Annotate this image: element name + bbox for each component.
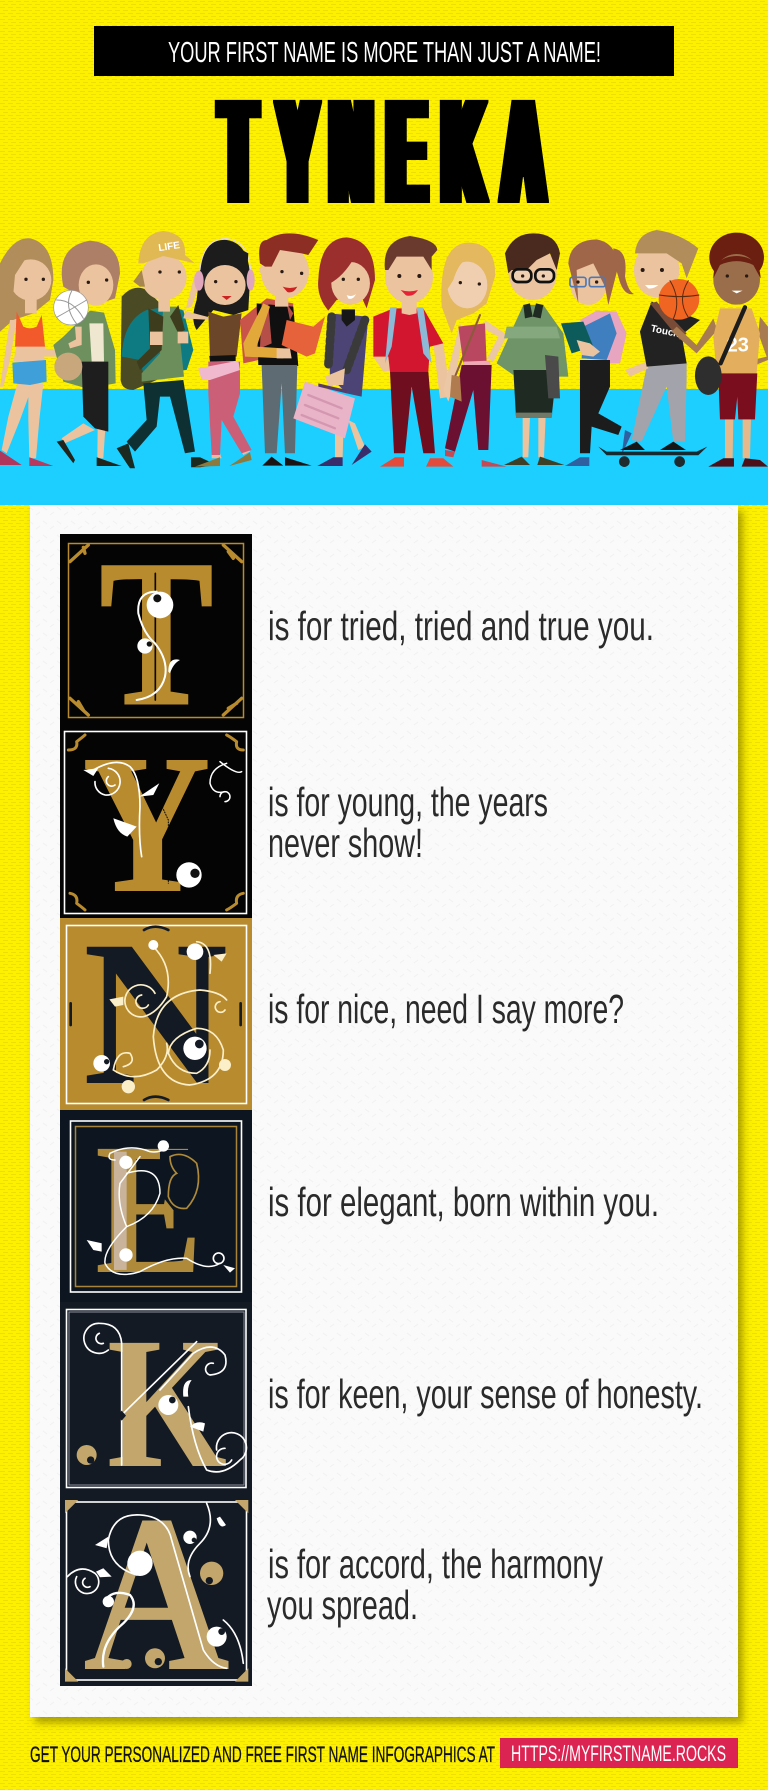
tile A: A [83,1468,230,1718]
tile N: N [83,898,228,1128]
person 3: hiker with backpack and cap [117,231,217,468]
person 3: hiker with backpack and cap: LIFE [158,240,181,254]
illustration: group of twelve young people [0,230,768,468]
header banner [94,26,674,76]
title: name: TYNEKA [221,68,543,234]
person 11: skater with basketball [598,230,707,467]
tile E: E [95,1104,203,1313]
text: A lines: is for accord, the harmony [268,1541,603,1587]
white card panel [30,505,738,1717]
floor band [0,389,768,505]
person 4: girl with headphones [182,239,255,467]
text: Y lines: never show! [268,820,423,866]
text: Y lines [268,779,548,866]
tile T: T [100,518,213,748]
tile Y: Y [83,714,210,933]
text: Y lines: is for young, the years [268,779,548,825]
person 9: boy with glasses and laptop [497,233,568,465]
tile K: K [107,1298,227,1507]
person 7: boy in red shirt [373,236,453,467]
person 1: girl in orange top [0,238,67,466]
person 10: girl with ponytail and tablet [561,239,634,466]
person 5: boy with red hair and open book [240,233,325,466]
person 11: skater with basketball: Touch [650,323,680,340]
person 8: blonde girl [441,243,507,467]
person 2: girl with volleyball [53,241,122,466]
person 6: girl with red bob and pink bag [293,237,375,466]
person 12: boy in jersey with shoulder bag: 23 [727,335,749,357]
text: A lines: you spread. [267,1582,418,1628]
text: N line: is for nice, need I say more? [268,986,624,1032]
person 12: boy in jersey with shoulder bag [672,233,768,467]
tile E [60,1104,252,1313]
footer call to action: GET YOUR PERSONALIZED AND FREE FIRST NAME INFOGRAPHICS AT [30,1742,495,1767]
text: A lines [267,1541,603,1628]
